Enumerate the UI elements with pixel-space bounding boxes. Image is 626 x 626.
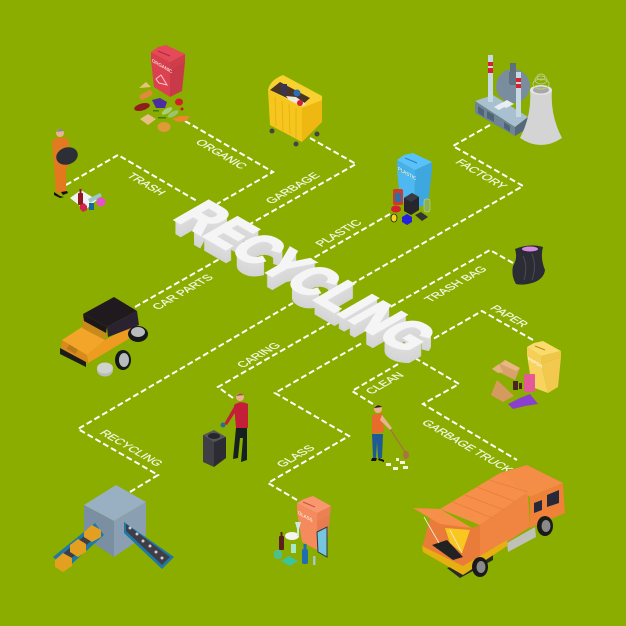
- label: garbage truck: GARBAGE TRUCK: [418, 419, 515, 475]
- icon: yellow paper bin: [527, 341, 561, 393]
- label: car parts: CAR PARTS: [150, 273, 217, 312]
- title: RECYCLING: [162, 193, 450, 360]
- icon: plastic trash pile: [70, 189, 106, 212]
- label: plastic: PLASTIC: [313, 219, 365, 248]
- label: clean: CLEAN: [364, 371, 407, 396]
- label: garbage: GARBAGE: [264, 171, 323, 206]
- label: paper: PAPER: [487, 304, 530, 329]
- icon: man sweeping: [371, 405, 409, 470]
- label: glass: GLASS: [275, 444, 318, 469]
- label: trash bag: TRASH BAG: [422, 265, 490, 304]
- icon: orange glass bin: [297, 496, 331, 550]
- dashed connectors: [66, 121, 533, 500]
- label: recycling: RECYCLING: [96, 429, 165, 468]
- icon: factory: [475, 55, 530, 136]
- icon: blue plastic bin: [397, 153, 432, 208]
- icon: orange glass bin: GLASS: [298, 510, 313, 525]
- icon: black bin: [203, 430, 226, 467]
- label: organic: ORGANIC: [192, 138, 249, 171]
- icon: recycling plant: [53, 485, 174, 572]
- icon: glass waste: [274, 522, 327, 566]
- label: factory: FACTORY: [452, 158, 509, 191]
- icon: yellow dumpster: [268, 75, 322, 146]
- label: caring: CARING: [235, 341, 284, 370]
- icon: yellow paper bin: PAPER: [528, 356, 543, 370]
- label: trash: TRASH: [124, 172, 168, 197]
- icon: food waste: [133, 82, 190, 132]
- icon: worker with trash bag: [52, 129, 80, 198]
- icon: red organic bin: [151, 45, 185, 97]
- icon: garbage truck: [413, 465, 565, 578]
- icon: red organic bin: ORGANIC: [152, 58, 173, 76]
- icon: trash bag: [512, 245, 545, 285]
- icon: cardboard and paper waste: [491, 360, 538, 409]
- icon: jeep: [60, 297, 148, 376]
- icon: blue plastic bin: PLASTIC: [398, 166, 416, 183]
- icon: plastic waste pile: [391, 189, 430, 225]
- icon: man with glass: [220, 393, 248, 462]
- icon: cooling tower: [520, 74, 562, 145]
